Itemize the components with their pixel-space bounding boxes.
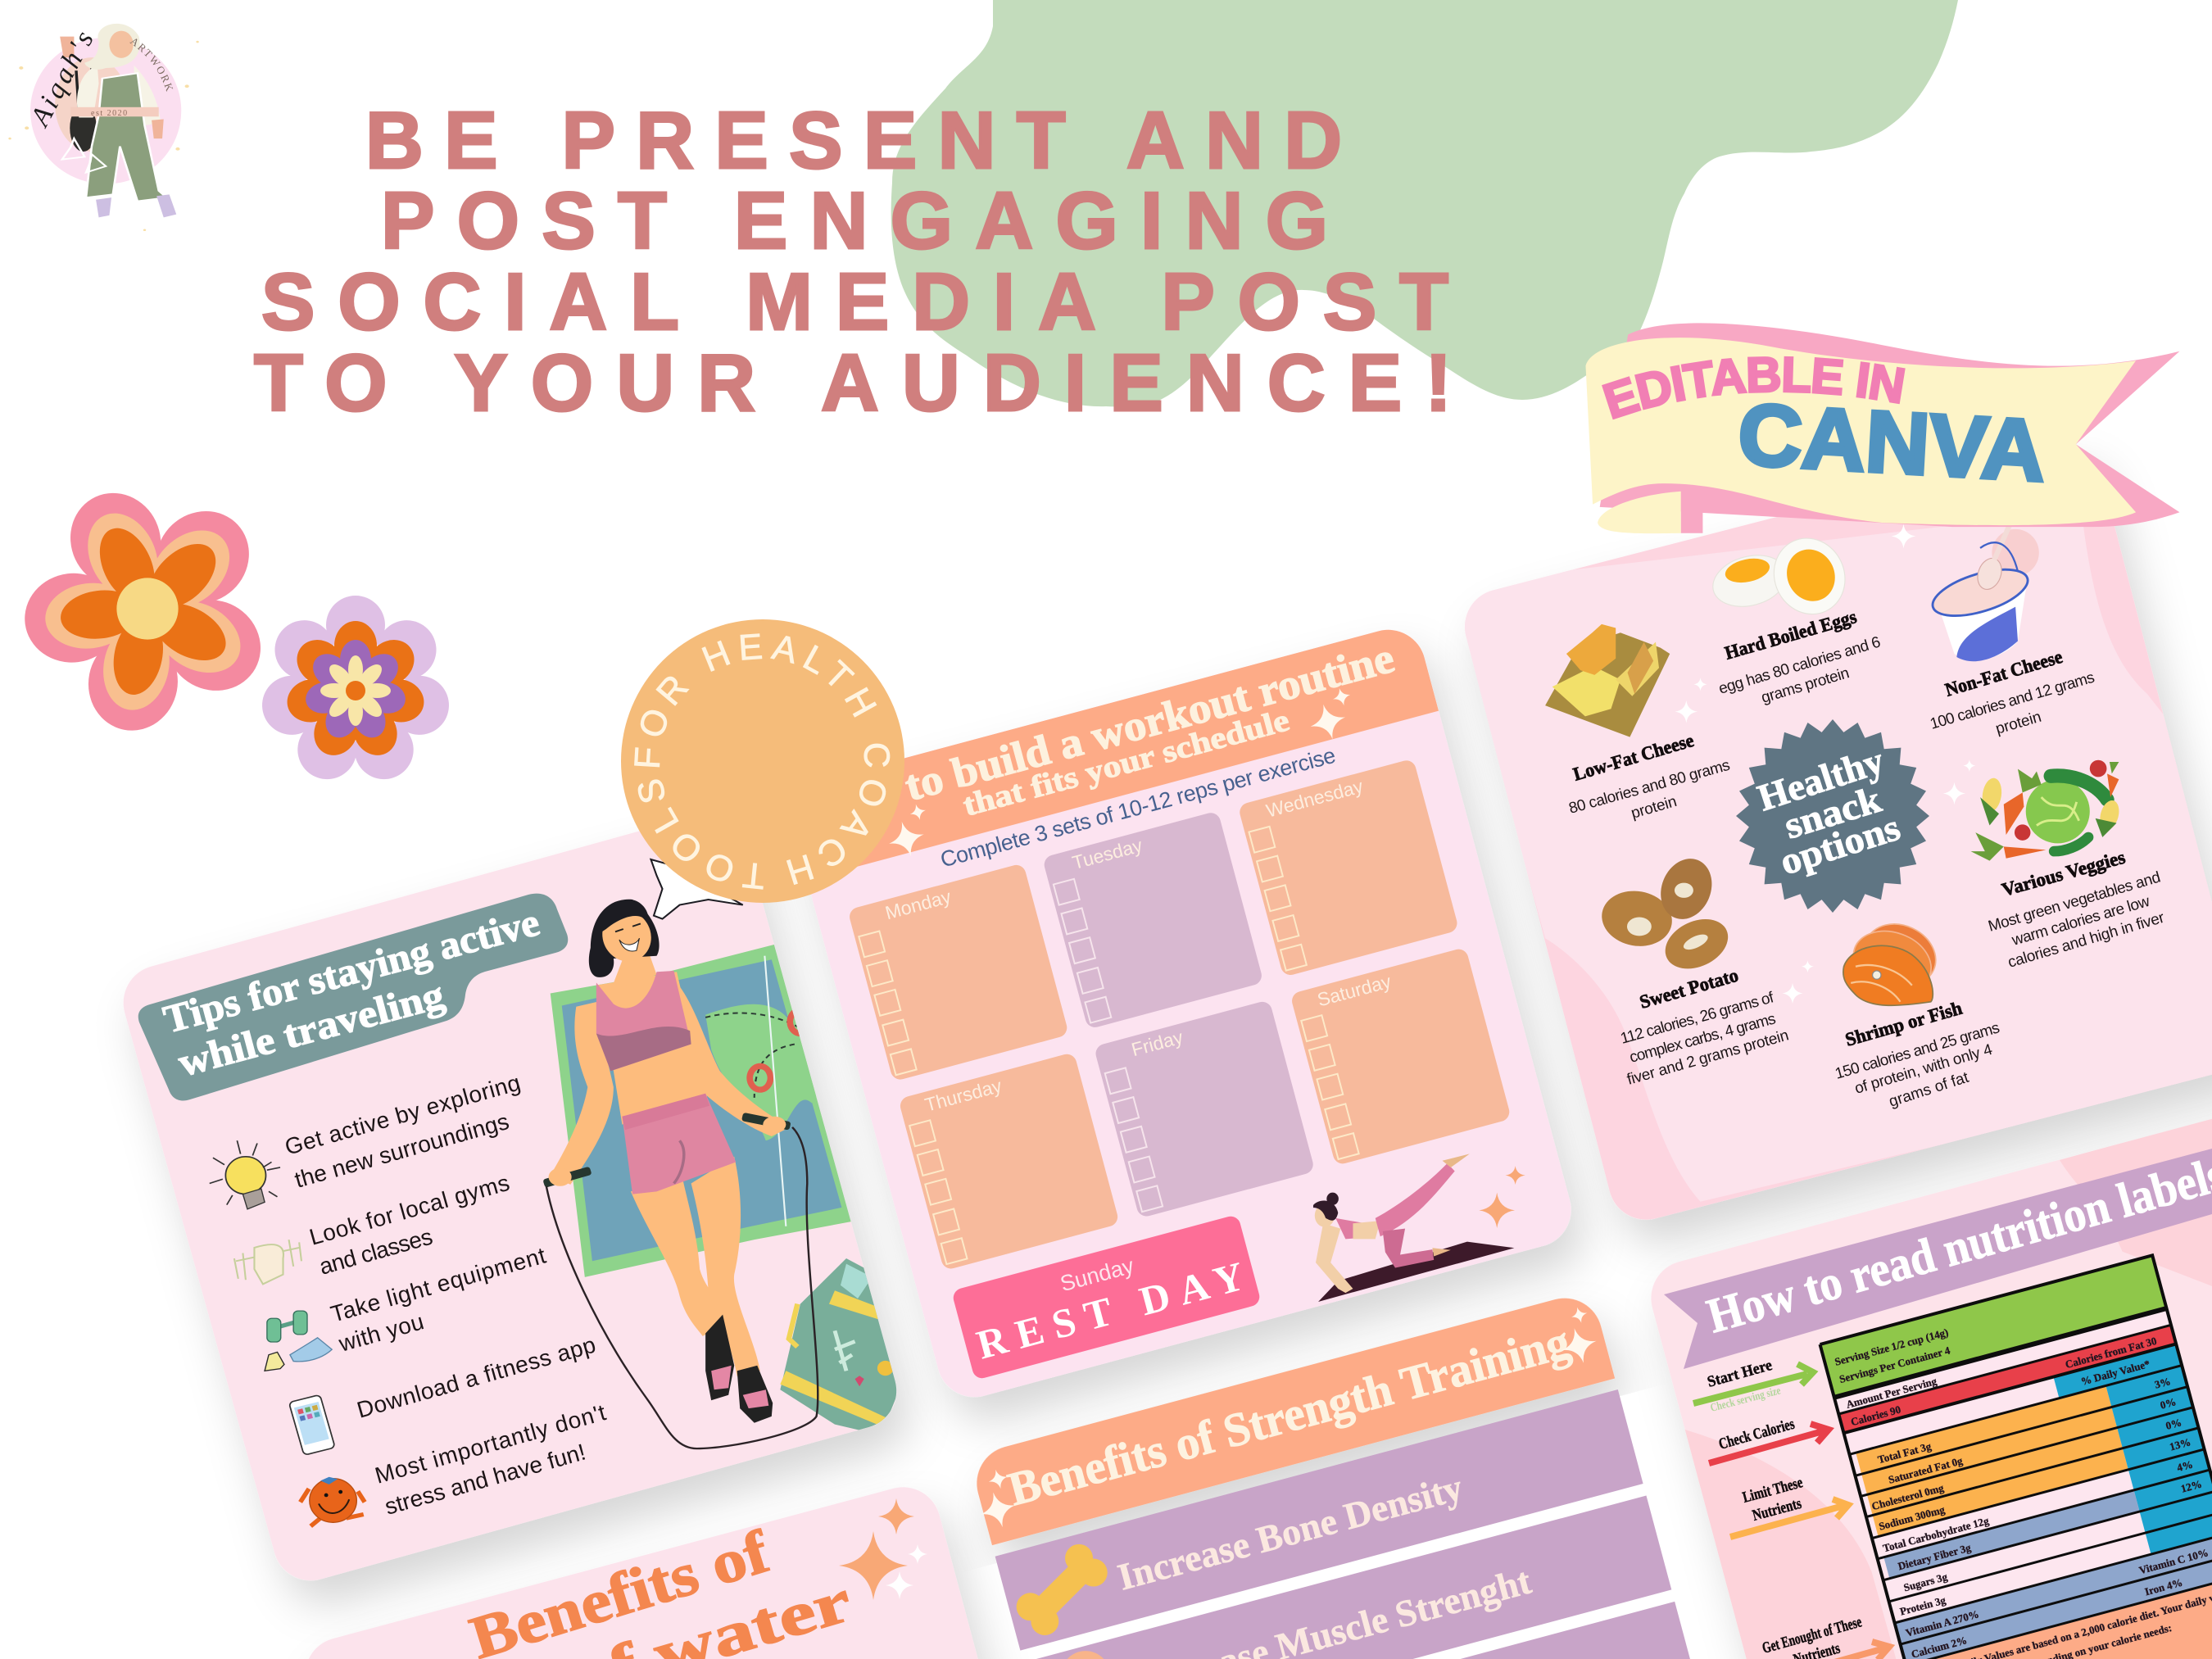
illustration: cheese board [1545,624,1670,737]
tips list: the new surroundings [292,1108,512,1193]
table labels: Calories 90 [1849,1403,1902,1428]
callout: start here [1693,1357,1813,1415]
sparkles on header [881,686,1362,861]
table labels: 0% [2159,1395,2178,1412]
snack: low-fat cheese: 80 calories and 80 grams [1567,757,1732,818]
snack: low-fat cheese: Low-Fat Cheese [1571,730,1696,785]
benefit bar: third [1052,1602,1700,1659]
title: POST ENGAGING [381,175,1328,265]
benefit bar: bone density [995,1389,1643,1651]
logo script name: Aiqah's [24,26,100,133]
snack: low-fat cheese [1567,730,1732,823]
snack: sweet potato [1619,965,1791,1089]
heading text: How [832,765,900,829]
icon: sparkles [839,1498,927,1600]
day panel: Tuesday [1042,811,1264,1030]
table labels: 3% [2153,1375,2172,1391]
subtitle: sets and reps: Complete 3 sets of 10-12 reps per exercise [938,743,1338,873]
panel: benefits of water [297,1479,1099,1659]
tips list: Take light equipment [328,1243,549,1327]
snack: sweet potato: 112 calories, 26 grams of [1619,989,1776,1048]
snack: sweet potato: Sweet Potato [1637,965,1741,1013]
tips list: and classes [316,1224,435,1280]
day panel: Saturday [1290,947,1512,1166]
title: TO YOUR AUDIENCE! [254,338,1452,428]
tips list: with you [335,1308,427,1357]
icon: bone [1011,1539,1113,1641]
snack: various veggies: warm calories are low [2010,893,2152,950]
snack: hard boiled eggs: grams protein [1759,664,1852,707]
tips list: stress and have fun! [382,1439,588,1520]
day panel: Wednesday: Wednesday [1264,775,1366,822]
snack: non-fat cheese: protein [1994,709,2043,738]
banner text: canva: CANVA [1736,386,2048,500]
header band [857,629,1439,867]
snack: various veggies: Most green vegetables and [1987,868,2163,936]
callout: get enough of these nutrients: Get Enought of These [1761,1613,1864,1657]
snack: various veggies: calories and high in fiver [2006,909,2167,972]
suitcase [780,1258,903,1435]
illustration: exercising woman on a mat [1313,1154,1525,1302]
title: BE PRESENT AND [365,95,1342,185]
day panel: Monday: Monday [883,886,954,923]
food illustrations [1545,524,2122,1005]
table labels: 0% [2164,1416,2183,1432]
panel heading: tips: while traveling [174,973,449,1086]
heading text [832,632,1406,854]
banner: editable in canva [1586,323,2179,534]
panel heading: tips [138,894,568,1101]
callout: limit these nutrients: Limit These [1741,1474,1805,1507]
benefit bar: bone density: Increase Bone Density [1113,1466,1466,1598]
icon: muscle [1055,1645,1116,1659]
table labels: Saturated Fat 0g [1887,1454,1965,1486]
table labels: Amount Per Serving [1845,1375,1938,1411]
callout: limit these nutrients: Nutrients [1751,1495,1803,1525]
table labels: Sodium 300mg [1878,1503,1947,1533]
callout: limit these nutrients [1730,1474,1848,1537]
tips list: Download a fitness app [354,1331,598,1423]
callout: get enough of these nutrients [1761,1613,1889,1659]
illustration: vegetables [1971,760,2122,861]
table labels: 12% [2179,1477,2203,1495]
table labels: Calories from Fat 30 [2064,1335,2158,1371]
table labels: Vitamin C 10% [2137,1546,2210,1576]
icon: light bulb [210,1140,280,1209]
tips list: Most importantly don't [372,1399,609,1489]
heading: benefits of water [463,1518,859,1659]
illustration: map behind the woman [551,944,855,1277]
woman head [589,900,660,977]
panel: tips for staying active while traveling [115,805,905,1589]
logo arc word: ARTWORK [129,39,174,92]
logo: illustrated woman artwork badge [8,24,199,231]
table labels: Servings Per Container 4 [1838,1344,1951,1385]
callout: start here: Check serving size [1709,1385,1782,1415]
title: SOCIAL MEDIA POST [261,256,1448,347]
day panel: Thursday [898,1052,1120,1271]
panel: how to read nutrition labels [1643,1081,2212,1659]
tips list: Get active by exploring [282,1070,524,1160]
day panel: Sunday rest day: Sunday [1058,1253,1137,1296]
day panel: Saturday: Saturday [1315,970,1394,1010]
snack: shrimp or fish: 150 calories and 25 grams [1834,1019,2001,1083]
panel: benefits of strength training [965,1290,1700,1659]
starburst: healthy snack options: snack [1779,778,1886,847]
snack: hard boiled eggs [1716,606,1883,707]
snack: low-fat cheese: protein [1630,793,1679,823]
snack: shrimp or fish: of protein, with only 4 [1853,1041,1995,1098]
starburst: healthy snack options: options [1775,806,1905,883]
benefit bar: muscle strength [1023,1495,1671,1659]
logo date label: est 2020 [91,109,129,118]
snack: hard boiled eggs: egg has 80 calories and 6 [1716,633,1883,698]
snack: shrimp or fish: Shrimp or Fish [1843,998,1965,1050]
starburst: healthy snack options: Healthy [1752,739,1888,819]
callout: check calories: Check Calories [1717,1416,1797,1453]
table labels: Protein 3g [1898,1593,1947,1618]
snack: hard boiled eggs: Hard Boiled Eggs [1722,606,1859,664]
icon: phone [289,1394,335,1455]
icon: smiling orange character [301,1477,365,1526]
tips list: Look for local gyms [306,1170,512,1250]
snack: non-fat cheese: 100 calories and 12 grams [1929,669,2096,733]
icon: green dumbbell, shoes and kettle [265,1311,332,1371]
panel: how to build a workout routine [783,621,1580,1406]
table labels: Total Carbohydrate 12g [1882,1514,1991,1554]
day panel: Tuesday: Tuesday [1070,834,1145,873]
callout: check calories [1709,1416,1829,1463]
day panel: Sunday rest day: REST DAY [972,1253,1249,1368]
table labels [1832,1271,2212,1659]
table labels: Cholesterol 0mg [1870,1481,1946,1512]
background green blob [891,0,1958,406]
day panel: Friday: Friday [1129,1026,1185,1060]
snack: non-fat cheese: Non-Fat Cheese [1942,646,2065,700]
table labels: Iron 4% [2143,1576,2184,1598]
icon: large retro flower [20,478,277,738]
icon: small purple flower [256,596,455,789]
table labels: Serving Size 1/2 cup (14g) [1834,1326,1950,1368]
table labels: Dietary Fiber 3g [1897,1541,1973,1572]
sparkles by exercise [1479,1166,1525,1228]
illustration: sweet potatoes [1598,851,1736,978]
strength heading: Benefits of Strength Training [1003,1315,1575,1516]
panel: healthy snack options [1437,436,2212,1228]
illustration: salmon [1843,913,1946,1005]
table labels: Total Fat 3g [1876,1439,1933,1466]
speech bubble [650,859,743,919]
heading text: that fits your schedule [959,703,1293,823]
table labels: 13% [2169,1435,2192,1453]
strength header band [968,1290,1615,1545]
badge: for health coach tools: TOOLSFOR HEALTH COACH [634,633,890,890]
banner text: editable in: EDITABLE IN [1602,356,1906,419]
snack: shrimp or fish: grams of fat [1887,1069,1971,1111]
panel heading: tips: Tips for staying active [159,900,544,1042]
table labels: % Daily Value* [2079,1358,2151,1388]
table labels: 4% [2175,1458,2194,1474]
nutrition facts table [1820,1255,2212,1659]
sparkles on strength header [968,1304,1603,1532]
starburst: healthy snack options [1736,719,1929,913]
snack: various veggies [1987,847,2167,972]
snack: non-fat cheese [1929,646,2096,738]
table labels: Vitamin A 270% [1904,1607,1980,1639]
icons for tips [210,1140,365,1526]
callout: start here: Start Here [1706,1357,1774,1391]
title [254,95,1452,428]
pink background patches [1668,1114,2212,1659]
heading text: to build a workout routine [900,635,1399,810]
illustration: yogurt cup [1928,524,2039,661]
illustration: boiled eggs [1707,527,1857,626]
woman body [542,950,791,1423]
snack: shrimp or fish [1834,998,2001,1111]
sparkles [1675,524,1975,1004]
icon: fist with dumbbell [234,1240,301,1284]
day panel: Sunday rest day [951,1214,1262,1380]
day panel: Friday [1094,999,1315,1218]
day panel: Monday [847,863,1069,1081]
table labels: Sugars 3g [1902,1571,1949,1593]
snack: sweet potato: complex carbs, 4 grams [1628,1010,1778,1067]
day panel: Wednesday [1238,759,1459,977]
snack: various veggies: Various Veggies [2000,847,2128,900]
snack: sweet potato: fiver and 2 grams protein [1625,1027,1791,1089]
lighter background wave [1437,510,2212,1202]
illustration: woman skipping rope [542,859,903,1448]
tips list [282,1070,609,1520]
day panel: Thursday: Thursday [922,1075,1004,1116]
skipping rope [546,1127,818,1448]
